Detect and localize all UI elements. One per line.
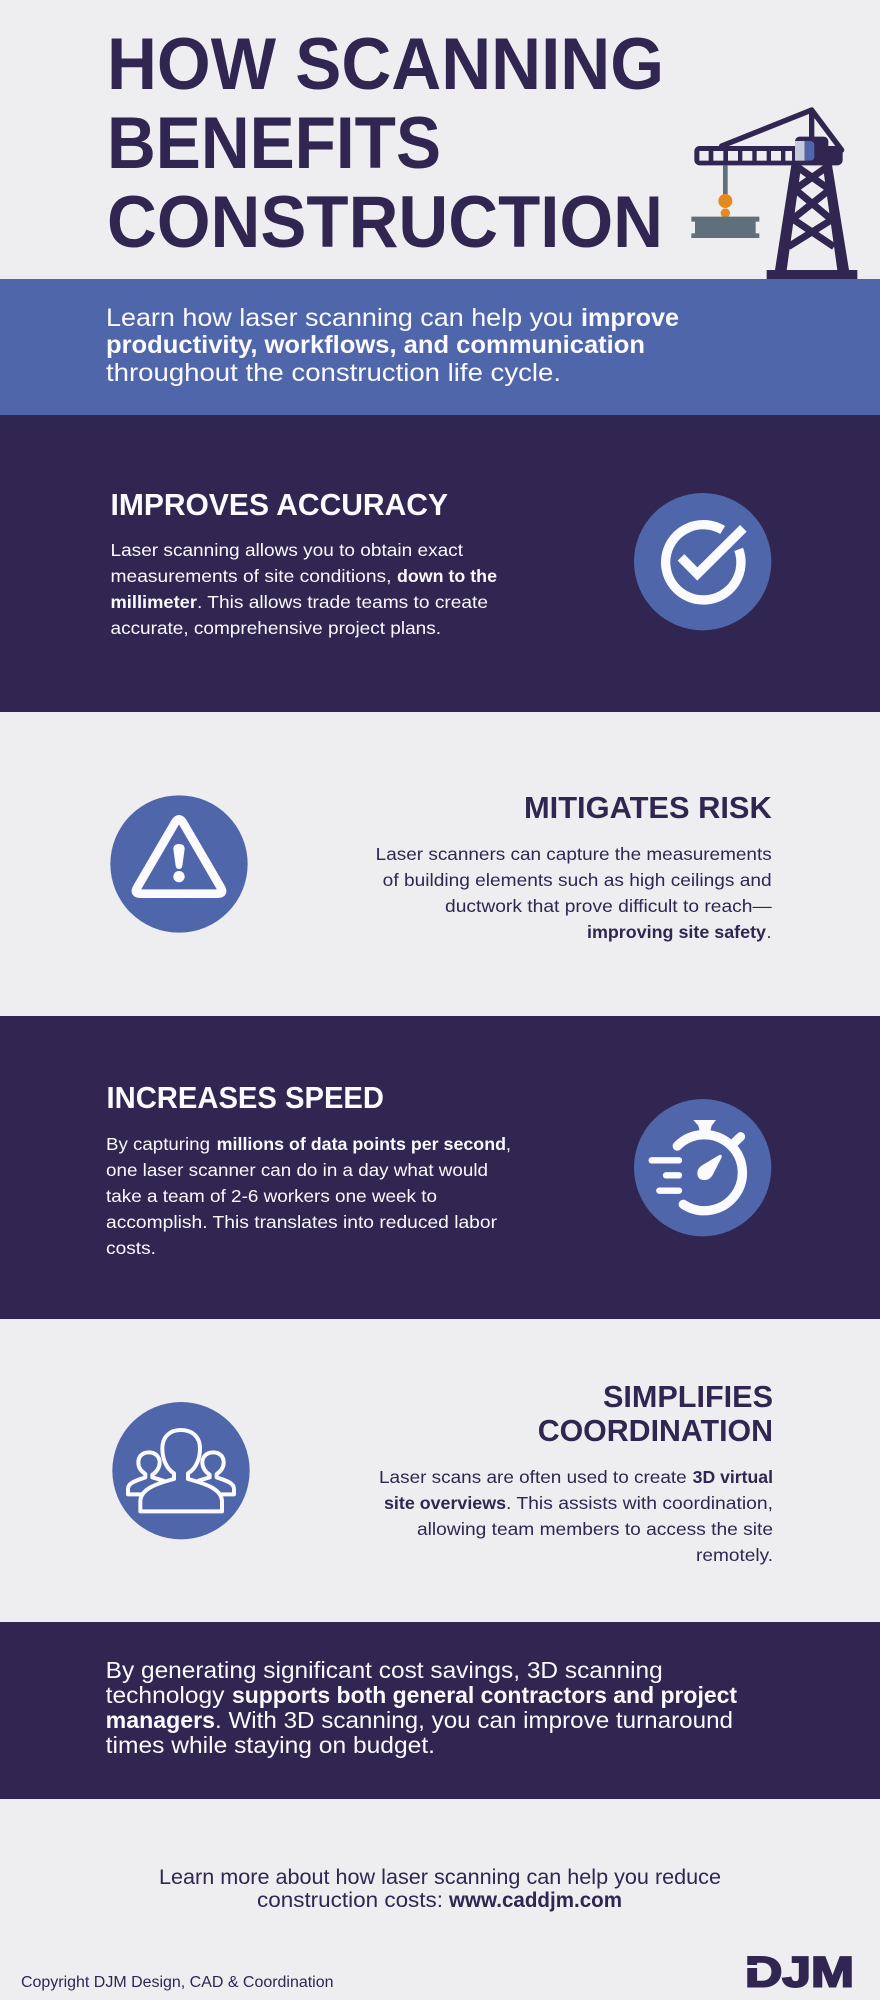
text block: accuracy body: Laser scanning allows you to obtain exact — [110, 540, 463, 560]
icon: stopwatch in circle — [634, 1099, 771, 1236]
text block: risk body: Laser scanners can capture the measurements — [376, 844, 772, 864]
text block: coordination body: 3D virtual — [693, 1467, 773, 1487]
logo: DJM: DJM — [745, 1948, 854, 1996]
panel: conclusion: supports both general contractors and project — [232, 1682, 737, 1708]
heading: simplifies coordination: COORDINATION — [538, 1413, 773, 1448]
text block: risk body: ductwork that prove difficult to reach— — [445, 896, 772, 916]
panel: mitigates risk — [110, 790, 772, 942]
panel: intro banner: throughout the construction life cycle. — [106, 359, 561, 387]
text block: risk body: of building elements such as high ceilings and — [383, 870, 772, 890]
text block: risk body: . — [766, 922, 771, 942]
call to action text — [159, 1866, 721, 1912]
text block: risk body — [376, 844, 772, 942]
call to action text: www.caddjm.com — [448, 1889, 622, 1912]
panel: intro banner: productivity, workflows, and communication — [106, 331, 645, 359]
text block: speed body: , — [506, 1134, 511, 1154]
text block: coordination body: . This assists with coordination, — [506, 1493, 773, 1513]
text block: accuracy body: down to the — [397, 566, 497, 586]
text block: speed body: accomplish. This translates into reduced labor — [106, 1212, 497, 1232]
panel: conclusion: technology — [106, 1682, 225, 1708]
panel: conclusion: managers — [106, 1707, 215, 1733]
heading: improves accuracy: IMPROVES ACCURACY — [110, 487, 448, 522]
text block: coordination body: remotely. — [696, 1545, 773, 1565]
text block: speed body: costs. — [106, 1238, 156, 1258]
icon: check mark in circle — [634, 493, 771, 630]
text block: speed body — [106, 1134, 511, 1258]
text block: accuracy body: millimeter — [110, 592, 197, 612]
panel: increases speed — [0, 1016, 880, 1319]
text block: speed body: take a team of 2-6 workers one week to — [106, 1186, 437, 1206]
title: CONSTRUCTION — [107, 182, 663, 263]
title: HOW SCANNING — [107, 24, 664, 105]
panel: conclusion: . With 3D scanning, you can improve turnaround — [215, 1707, 733, 1733]
title — [107, 24, 664, 263]
icon: team of people in circle — [112, 1402, 250, 1539]
panel: simplifies coordination — [112, 1379, 773, 1565]
icon: construction crane — [691, 110, 857, 279]
title: BENEFITS — [107, 103, 441, 184]
text block: speed body: By capturing — [106, 1134, 210, 1154]
heading: simplifies coordination: SIMPLIFIES — [603, 1379, 773, 1414]
copyright text: Copyright DJM Design, CAD & Coordination — [21, 1974, 334, 1991]
text block: speed body: one laser scanner can do in a day what would — [106, 1160, 488, 1180]
text block: coordination body: allowing team members to access the site — [417, 1519, 773, 1539]
heading: mitigates risk: MITIGATES RISK — [524, 790, 772, 825]
icon: warning triangle in circle — [110, 795, 248, 933]
panel: conclusion: times while staying on budget. — [106, 1732, 435, 1758]
text block: accuracy body — [110, 540, 497, 638]
text block: coordination body — [379, 1467, 773, 1565]
text block: accuracy body: measurements of site conditions, — [110, 566, 392, 586]
panel: improves accuracy — [0, 415, 880, 712]
panel: intro banner: Learn how laser scanning can help you — [106, 304, 573, 332]
text block: coordination body: Laser scans are often used to create — [379, 1467, 687, 1487]
panel: intro banner: improve — [581, 304, 679, 332]
text block: accuracy body: accurate, comprehensive project plans. — [110, 618, 441, 638]
call to action text: construction costs: — [257, 1889, 443, 1912]
call to action text: Learn more about how laser scanning can help you reduce — [159, 1866, 721, 1889]
panel: conclusion — [0, 1622, 880, 1799]
heading: simplifies coordination — [538, 1379, 773, 1448]
text block: risk body: improving site safety — [587, 922, 766, 942]
panel: conclusion: By generating significant cost savings, 3D scanning — [106, 1657, 663, 1683]
text block: coordination body: site overviews — [384, 1493, 506, 1513]
text block: accuracy body: . This allows trade teams to create — [197, 592, 488, 612]
panel: intro banner — [0, 279, 880, 415]
text block: speed body: millions of data points per second — [217, 1134, 506, 1154]
heading: increases speed: INCREASES SPEED — [106, 1080, 384, 1115]
